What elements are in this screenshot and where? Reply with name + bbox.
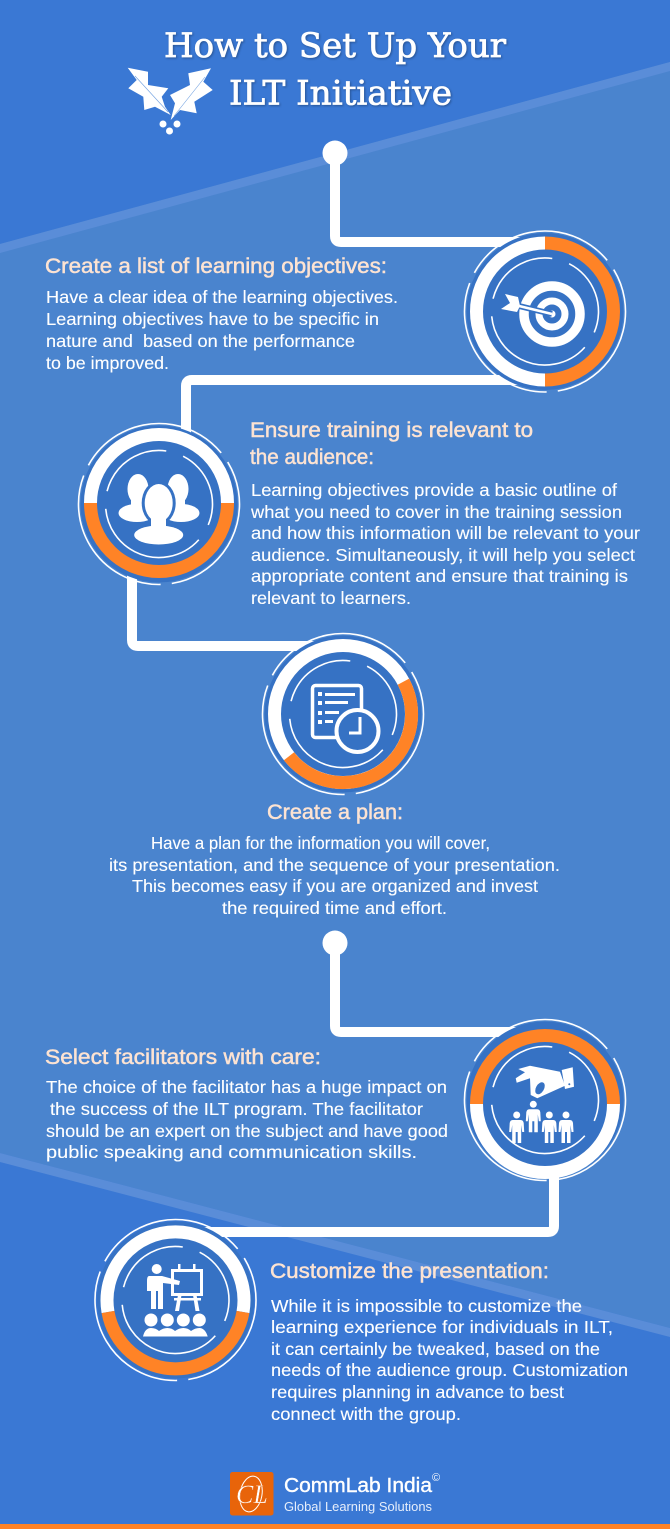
body text: nature and based on the performance <box>46 331 355 351</box>
icon: holly leaves <box>128 68 213 134</box>
connector: facilitators to presentation <box>195 1160 554 1232</box>
body text: the success of the ILT program. The facilitator <box>50 1099 423 1119</box>
icon: document with clock <box>312 686 378 752</box>
body text: and how this information will be relevant to your <box>251 523 640 543</box>
body text: connect with the group. <box>271 1404 461 1424</box>
body text: what you need to cover in the training session <box>250 502 622 522</box>
panel: step 1 badge, target <box>435 201 655 422</box>
tagline: Global Learning Solutions <box>284 1499 432 1514</box>
icon: CommLab logo mark: CL <box>236 1480 268 1509</box>
connector: start to objectives <box>322 140 525 242</box>
title <box>164 26 507 114</box>
panel: step 5 text <box>270 1259 628 1424</box>
body text: appropriate content and ensure that training is <box>251 566 628 586</box>
panel: step 3 badge, plan <box>233 604 453 824</box>
icon: presenter with audience <box>143 1264 208 1336</box>
body text <box>250 480 640 608</box>
body text: relevant to learners. <box>251 588 411 608</box>
brand name: CommLab India <box>284 1474 433 1497</box>
body text: Learning objectives provide a basic outline of <box>251 480 617 500</box>
body text: While it is impossible to customize the <box>271 1296 582 1316</box>
footer bar <box>0 1524 670 1529</box>
heading <box>250 418 533 469</box>
body text: Learning objectives have to be specific in <box>46 309 379 329</box>
body text <box>46 287 398 373</box>
body text: its presentation, and the sequence of your presentation. <box>109 855 560 875</box>
title: ILT Initiative <box>229 74 452 114</box>
body text: audience. Simultaneously, it will help you select <box>251 545 635 565</box>
body text: learning experience for individuals in ILT, <box>271 1317 613 1337</box>
body text: The choice of the facilitator has a huge impact on <box>46 1077 447 1097</box>
icon: CommLab logo mark <box>230 1472 274 1516</box>
body text: needs of the audience group. Customization <box>271 1360 628 1380</box>
body text: Have a plan for the information you will cover, <box>151 833 490 853</box>
body text: public speaking and communication skills. <box>46 1142 417 1162</box>
body text: requires planning in advance to best <box>271 1382 564 1402</box>
panel: step 1 text <box>45 254 398 373</box>
panel: step 2 badge, audience <box>49 394 269 614</box>
heading: Create a plan: <box>267 800 403 824</box>
body text: Have a clear idea of the learning objectives. <box>46 287 398 307</box>
heading: Select facilitators with care: <box>45 1045 321 1069</box>
icon: hand picking a person <box>509 1066 574 1143</box>
body text: should be an expert on the subject and have good <box>46 1121 448 1141</box>
panel: step 4 text <box>45 1045 448 1162</box>
heading: Ensure training is relevant to <box>250 418 533 442</box>
connector: dot to facilitators <box>322 930 525 1032</box>
icon: target with arrow <box>501 286 580 342</box>
body text: it can certainly be tweaked, based on the <box>271 1339 600 1359</box>
footer logo <box>230 1472 440 1516</box>
connector: objectives to audience <box>186 380 525 450</box>
connector: audience to plan <box>132 560 325 646</box>
panel: step 5 badge, presentation <box>65 1190 286 1410</box>
heading: Customize the presentation: <box>270 1259 549 1283</box>
title: How to Set Up Your <box>164 26 507 66</box>
body text: This becomes easy if you are organized and invest <box>132 876 538 896</box>
panel: step 2 text <box>250 418 640 608</box>
body text: the required time and effort. <box>222 898 447 918</box>
body text <box>46 1077 448 1162</box>
icon: group of people <box>118 474 200 547</box>
heading: Create a list of learning objectives: <box>45 254 387 278</box>
body text: to be improved. <box>46 353 169 373</box>
heading: the audience: <box>250 445 374 469</box>
body text <box>109 833 560 918</box>
copyright mark: © <box>432 1472 440 1484</box>
panel: step 3 text <box>109 800 560 918</box>
panel: step 4 badge, facilitators <box>435 990 655 1210</box>
body text <box>271 1296 628 1424</box>
